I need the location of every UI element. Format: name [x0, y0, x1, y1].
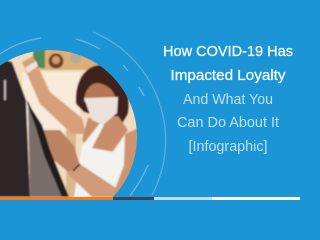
subtitle [177, 91, 280, 155]
face [84, 83, 116, 102]
photo: woman in mask browsing clothes [0, 48, 140, 200]
dark garment [0, 48, 30, 197]
nails [37, 132, 44, 152]
garment strap [26, 100, 69, 197]
garment stripe [4, 80, 6, 100]
shop background [0, 48, 140, 200]
grey textile [28, 100, 64, 197]
bottom colour bar [0, 197, 300, 200]
subtitle: [Infographic] [188, 138, 268, 155]
bracelet [73, 164, 80, 171]
decorative arcs [0, 32, 166, 196]
subtitle: Can Do About It [177, 114, 280, 131]
title: How COVID-19 Has [163, 43, 293, 60]
face mask [84, 97, 118, 125]
far arm [112, 128, 138, 197]
subtitle: And What You [183, 91, 273, 108]
hair [76, 65, 129, 124]
watch band [25, 61, 38, 73]
hand [40, 130, 80, 172]
title: Impacted Loyalty [170, 67, 286, 84]
title [163, 43, 293, 84]
white top [74, 123, 125, 197]
neck and chest [82, 116, 128, 152]
raised arm [22, 56, 86, 134]
infographic cover [0, 32, 300, 200]
near forearm [68, 164, 116, 197]
